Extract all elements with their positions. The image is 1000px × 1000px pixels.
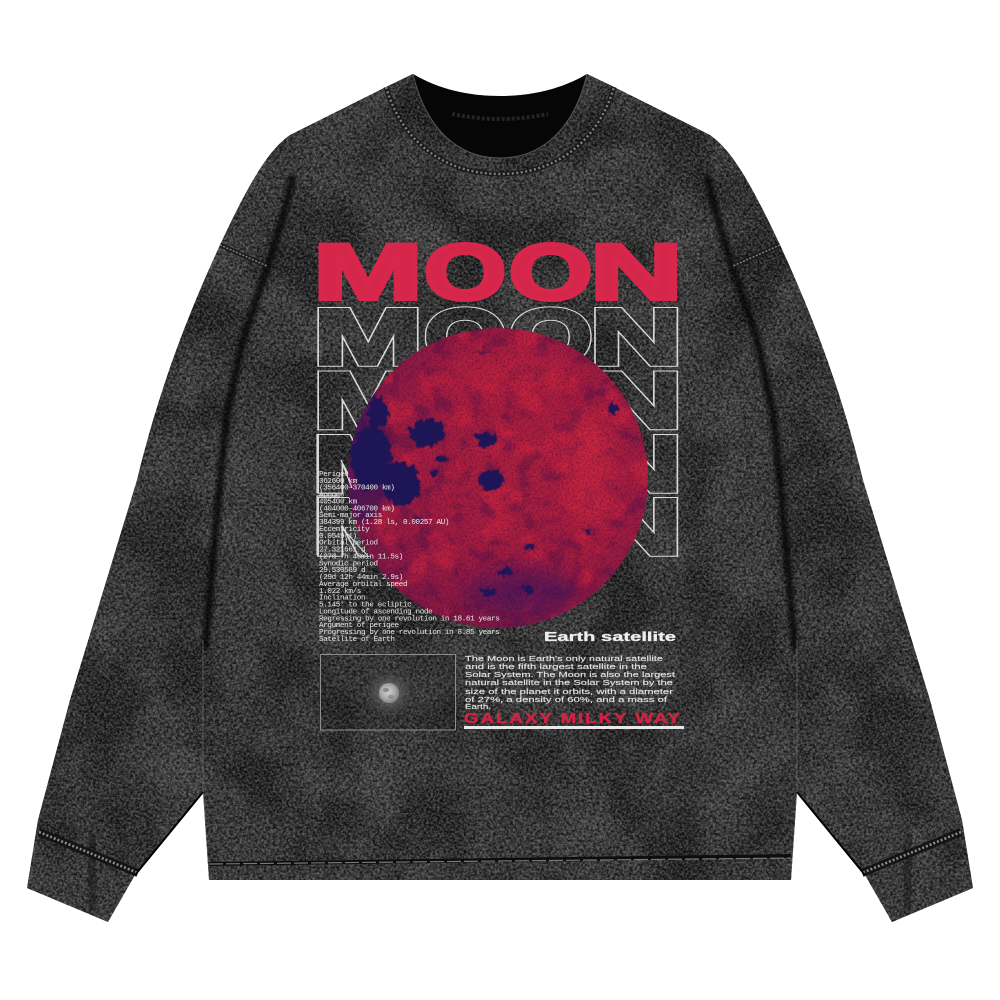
outline row 3: N [590,420,682,508]
orbital data text: 362600 km [319,478,358,486]
orbital data text: Eccentricity [319,526,370,534]
description paragraph: size of the planet it orbits, with a diameter [465,687,674,696]
orbital data text: 5.145° to the ecliptic [319,601,411,610]
orbital data text: Regressing by one revolution in 18.61 years [319,615,499,623]
description paragraph [465,654,676,711]
orbital data text: Argument of perigee [319,622,400,630]
orbital data text: Satellite of Earth [319,636,395,644]
description paragraph: and is the fifth largest satellite in the [465,662,647,671]
outline row 2: M [313,357,423,445]
orbital data text: Apogee [319,492,345,500]
outline row 4 [317,497,678,557]
outline row 3 [317,434,678,494]
orbital data text: (404000–406700 km) [319,505,395,513]
orbital data text: 384399 km (1.28 ls, 0.00257 AU) [319,519,449,527]
outline row 3: M [313,421,423,508]
GALAXY MILKY WAY label: GALAXY MILKY WAY [464,710,682,727]
outline row 3: O [509,420,593,508]
subtitle: Earth satellite: Earth satellite [544,629,676,644]
moon base [348,328,648,628]
outline row 4: O [509,483,593,571]
red moon illustration [348,328,648,628]
small moon photo box [320,654,456,730]
orbital data text: Semi-major axis [319,512,382,520]
orbital data text: (27d 7h 43min 11.5s) [319,553,403,561]
outline row 1: N [590,293,682,381]
title: MOON: O [509,228,593,316]
moon maria dark patches [351,350,617,596]
orbital data text: 0.0549(1) [319,533,357,541]
outline row 1: O [509,293,593,381]
title: MOON [313,227,682,316]
orbital data text: Longitude of ascending node [319,608,433,616]
description paragraph: The Moon is Earth's only natural satellite [465,654,663,663]
orbital data text: Inclination [319,595,365,603]
description paragraph: of 27%, a density of 60%, and a mass of [465,695,668,704]
outline row 2: N [590,356,682,445]
outline row 1 [317,306,678,367]
outline row 4: O [424,482,506,571]
title: MOON: M [313,229,423,316]
orbital data text: Synodic period [319,560,378,568]
orbital data text: (356400–370400 km) [319,485,395,493]
white rule [464,726,684,729]
orbital data text: Perigee [319,471,349,479]
orbital data text: (29d 12h 44min 2.9s) [319,574,403,582]
title: MOON: N [590,228,682,316]
orbital data text: Average orbital speed [319,581,407,589]
outline row 2 [317,370,678,430]
orbital data text: Orbital period [319,540,378,548]
moon surface texture [348,328,648,628]
outline row 3: O [424,419,506,508]
collar stitching [386,87,614,174]
description paragraph: natural satellite in the Solar System by the [465,678,673,687]
outline row 2: O [509,356,593,444]
orbital data text: 29.530589 d [319,567,365,575]
description paragraph: Earth. [465,702,491,711]
description paragraph: Solar System. The Moon is also the largest [465,670,676,679]
orbital data text: 405400 km [319,498,358,506]
orbital data text: 27.321661 d [319,547,365,555]
outline row 4: M [313,484,423,571]
outline row 2: O [424,356,506,444]
outline row 1: O [424,292,506,381]
orbital data text: 1.022 km/s [319,588,361,596]
outline row 4: N [590,483,682,571]
outline fragments over moon edge [317,434,368,556]
outlined repeated MOON rows [317,306,678,557]
title: MOON: O [424,227,506,316]
cuffs and hem stitching [39,792,961,875]
orbital data text: Progressing by one revolution in 8.85 years [319,629,499,637]
outline row 1: M [313,294,423,381]
sleeve seams [220,245,780,266]
